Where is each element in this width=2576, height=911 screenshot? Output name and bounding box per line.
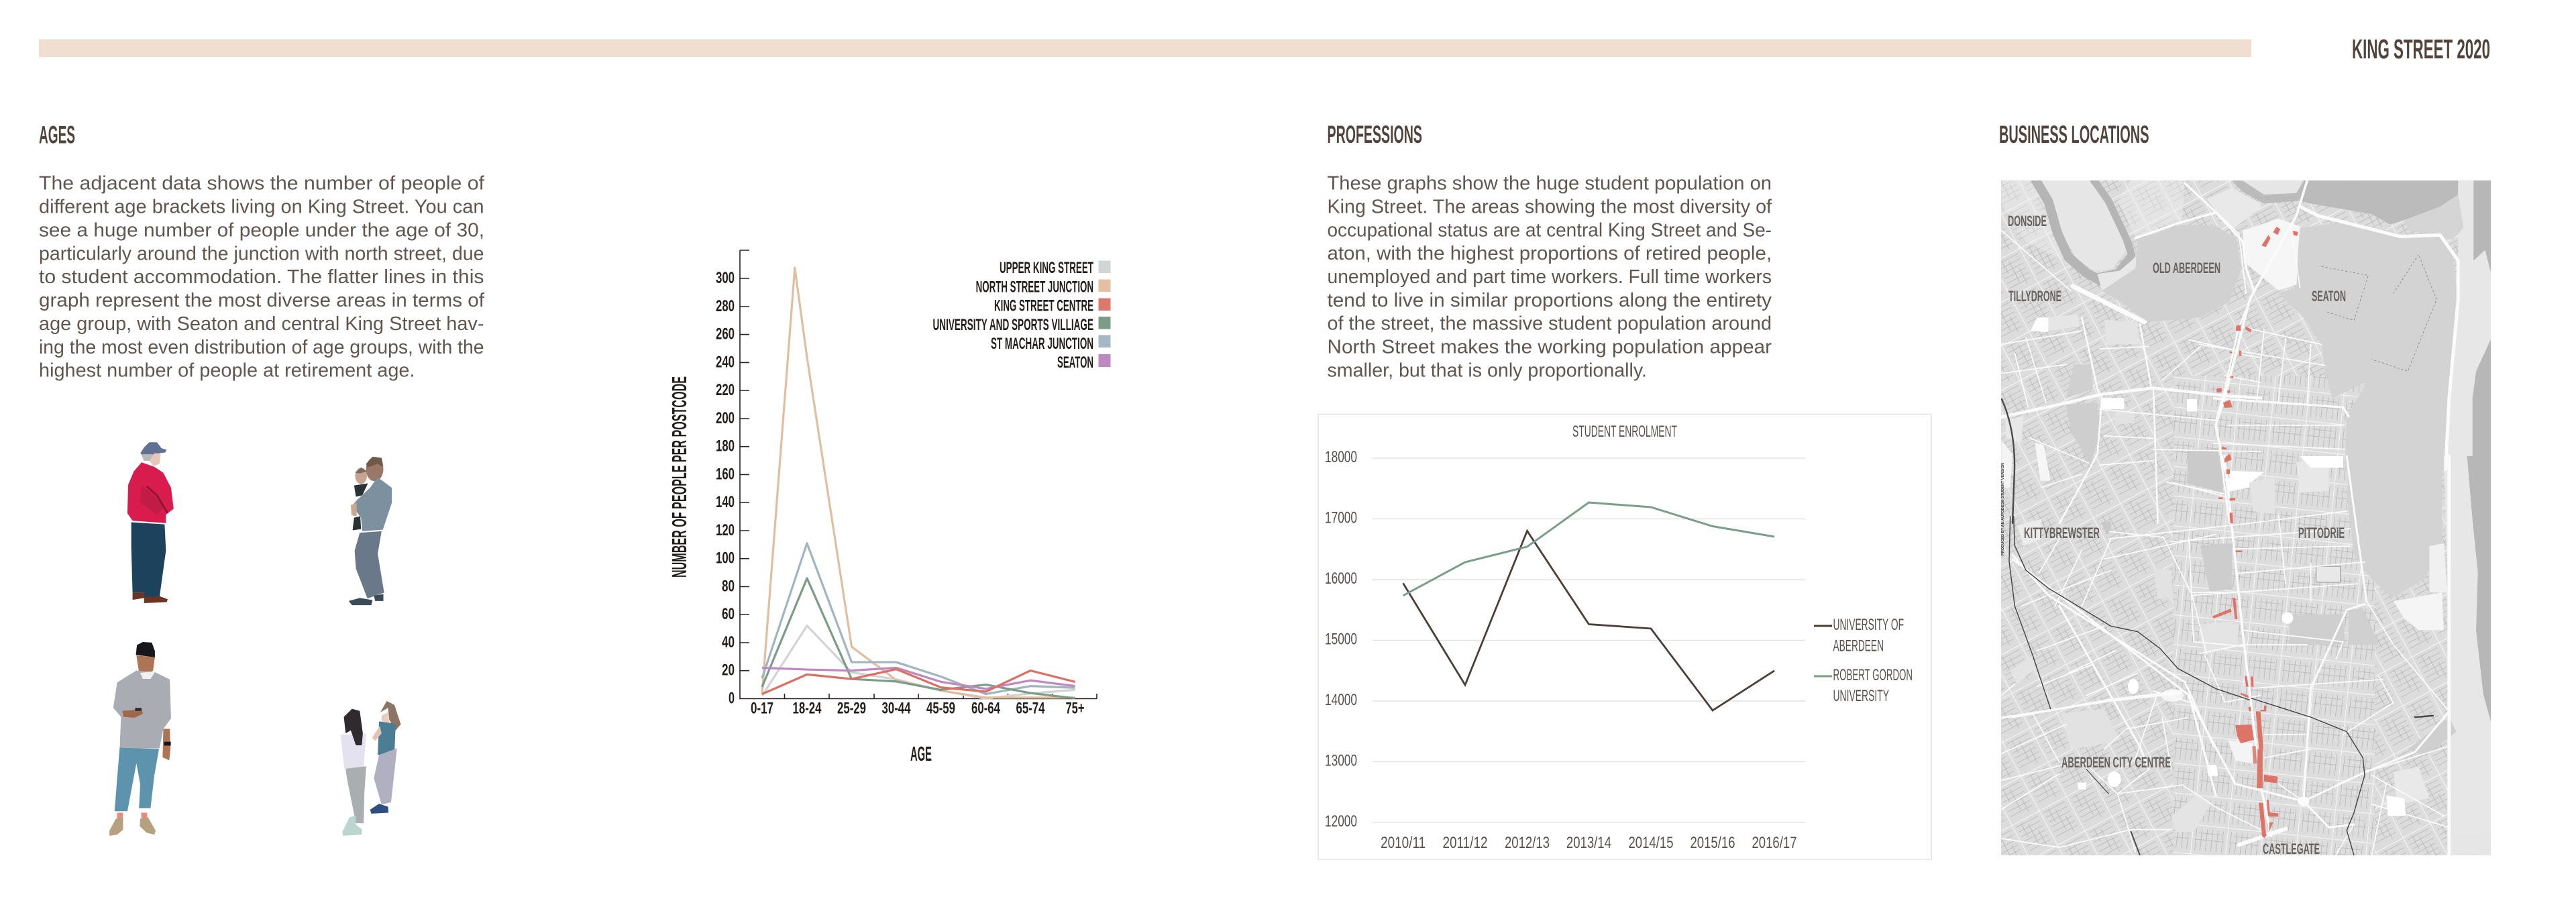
map labels: DONSIDE [2008,213,2047,229]
y axis labels: 280 [716,297,735,315]
map areas upper right [2188,180,2491,470]
x axis labels: 2015/16 [1690,834,1735,852]
legend: KING STREET CENTRE [994,297,1093,315]
legend: UNIVERSITY AND SPORTS VILLIAGE [932,316,1093,334]
y axis labels: 60 [722,605,735,623]
x axis labels: 45-59 [926,699,955,718]
text block: ages description: see a huge number of people under the age of 30, [39,219,484,241]
x axis labels: 18-24 [793,699,822,718]
header bar [39,39,2251,57]
panel: ages text [39,121,485,382]
y axis labels: 15000 [1325,631,1357,648]
map labels: ABERDEEN CITY CENTRE [2061,754,2171,771]
text block: ages description: age group, with Seaton and central King Street hav- [39,313,484,335]
legend: ROBERT GORDON [1833,666,1913,684]
business locations: red parcels [2212,227,2298,839]
legend [932,259,1111,372]
map labels: CASTLEGATE [2263,841,2320,857]
y axis labels: 13000 [1325,751,1357,770]
text block: ages description: The adjacent data shows the number of people of [39,173,485,195]
roads lower right [2012,456,2449,855]
x axis labels: 2011/12 [1442,834,1488,852]
text block: ages description: graph represent the most diverse areas in terms of [39,290,485,311]
y axis labels [716,269,735,707]
y axis labels: 12000 [1325,812,1357,830]
text block: professions description: aton, with the highest proportions of retired people, [1327,243,1772,264]
map: business locations in Aberdeen [2001,179,2491,857]
chart title: STUDENT ENROLMENT [1572,423,1677,441]
text block: ages description: particularly around the junction with north street, due [39,243,484,264]
chart: number of people per postcode by age [667,250,1111,765]
map areas upper left [2001,179,2261,492]
y axis labels: 80 [722,577,735,596]
y axis labels: 16000 [1325,570,1357,588]
y axis labels: 240 [716,353,735,371]
y axis labels: 220 [716,381,735,399]
line: robert gordon university [1403,502,1774,596]
legend: UNIVERSITY OF [1833,616,1904,634]
x axis labels: 60-64 [971,699,1000,718]
x axis labels: 65-74 [1016,699,1045,718]
text block: ages description: ing the most even distribution of age groups, with the [39,337,484,358]
text block: professions description: smaller, but that is only proportionally. [1327,360,1647,381]
y axis labels: 300 [716,269,735,287]
roads upper left [2001,183,2261,523]
map labels: PRODUCED BY AN AUTODESK STUDENT VERSION [2001,463,2005,555]
y axis labels: 18000 [1325,448,1357,466]
text block: ages description: to student accommodation. The flatter lines in this [39,266,484,288]
map roads [2001,180,2458,855]
x axis labels [1381,834,1796,852]
figure: two girls [341,701,401,836]
legend [1814,616,1913,705]
legend: ST MACHAR JUNCTION [991,335,1093,353]
data lines [762,268,1075,698]
text block: professions description [1327,173,1772,381]
axes [740,250,1097,699]
x axis labels: 2012/13 [1505,834,1550,852]
x axis labels: 2010/11 [1381,834,1426,852]
y axis labels: 100 [716,549,735,568]
text block: ages description [39,173,485,382]
map labels [2001,213,2346,857]
x axis labels: 0-17 [751,699,773,718]
y axis labels: 40 [722,633,735,651]
text block: professions description: King Street. The areas showing the most diversity of [1327,196,1772,217]
roads lower left [2001,525,2261,852]
figure: older man in red jacket [127,442,174,603]
x axis labels: 2013/14 [1566,834,1611,852]
map labels: KITTYBREWSTER [2024,525,2100,541]
y axis labels: 180 [716,437,735,455]
y axis labels: 17000 [1325,508,1357,527]
legend: UNIVERSITY [1833,687,1889,705]
map areas lower left [2010,519,2239,832]
map labels: SEATON [2312,288,2346,305]
chart: student enrolment [1318,415,1931,859]
railway lines [2002,399,2433,855]
y axis labels [1325,448,1357,830]
text block: professions description: tend to live in similar proportions along the entirety [1327,290,1772,311]
y axis labels: 20 [722,661,735,680]
heading: ages: AGES [39,121,75,149]
heading: business locations: BUSINESS LOCATIONS [1999,121,2149,148]
text block: professions description: North Street makes the working population appear [1327,337,1772,358]
text block: professions description: of the street, the massive student population around [1327,313,1772,335]
x axis labels: 2016/17 [1752,834,1796,852]
figures: people illustrations [109,442,401,836]
chart frame [1318,415,1931,859]
map labels: OLD ABERDEEN [2153,260,2220,276]
heading: professions: PROFESSIONS [1327,121,1422,148]
x axis labels: 25-29 [837,699,866,718]
gridlines [1373,458,1805,822]
y axis labels: 0 [729,690,735,707]
map areas lower right [2188,456,2491,855]
x axis labels: 30-44 [881,699,911,718]
legend: SEATON [1057,354,1093,372]
axis title: y: NUMBER OF PEOPLE PER POSTCODE [667,376,691,578]
text block: ages description: highest number of people at retirement age. [39,360,415,382]
legend: UPPER KING STREET [1000,259,1093,277]
y axis labels: 120 [716,521,735,539]
y axis labels: 140 [716,493,735,511]
legend: NORTH STREET JUNCTION [976,278,1093,296]
text block: ages description: different age brackets living on King Street. You can [39,197,484,218]
map labels: TILLYDRONE [2008,288,2061,305]
x axis labels [751,699,1084,718]
text block: professions description: unemployed and part time workers. Full time workers [1327,266,1772,288]
roads upper right [2185,180,2458,470]
y axis labels: 200 [716,409,735,427]
line: university of aberdeen [1403,531,1774,710]
text block: professions description: These graphs show the huge student population on [1327,173,1772,195]
figure: man carrying child [349,457,392,605]
map labels: PITTODRIE [2298,525,2345,541]
y axis labels: 260 [716,325,735,343]
x axis labels: 2014/15 [1629,834,1673,852]
y axis labels: 14000 [1325,691,1357,709]
chart: number of people per postcode by age: AGE [910,742,932,765]
figure: man with phone [109,642,171,836]
legend: ABERDEEN [1833,637,1884,655]
map base [2001,180,2491,855]
x axis labels: 75+ [1065,699,1084,718]
y axis labels: 160 [716,465,735,483]
panel: professions text [1327,121,1772,381]
text block: professions description: occupational status are at central King Street and Se- [1327,219,1772,241]
